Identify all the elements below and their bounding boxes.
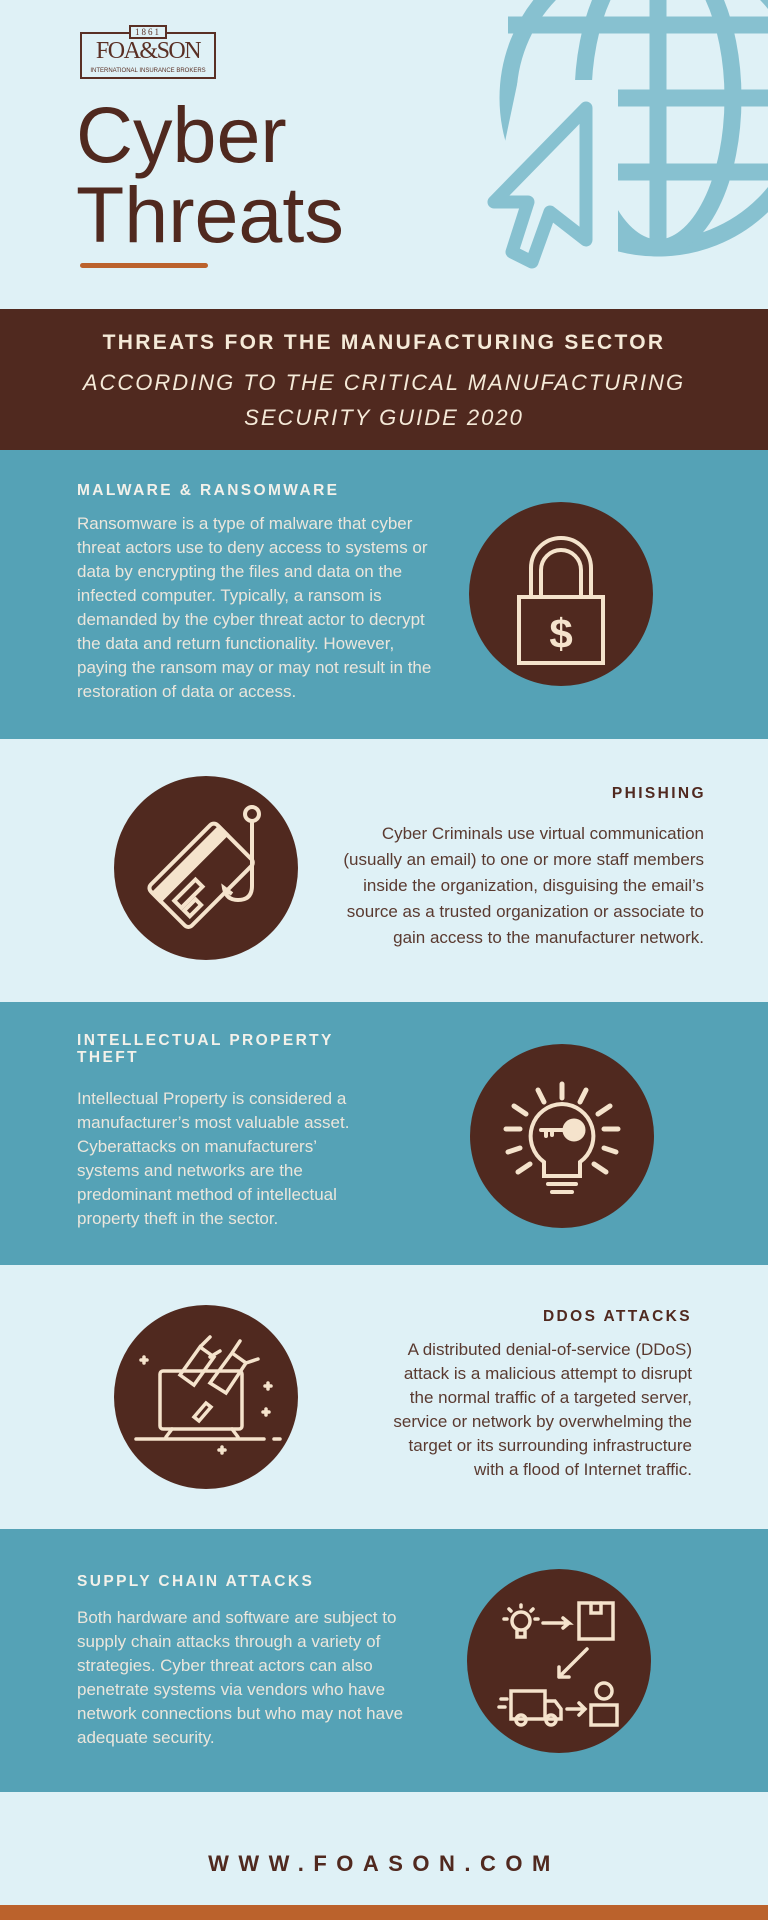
panel: IP theft: property theft in the sector. [77,1209,278,1228]
panel: malware: infected computer. Typically, a ransom is [77,586,382,605]
logo [80,25,216,79]
footer url: WWW.FOASON.COM [208,1851,560,1876]
panel: malware: threat actors use to deny access to systems or [77,538,428,557]
panel: phishing: PHISHING [612,785,706,802]
banner: ACCORDING TO THE CRITICAL MANUFACTURING [83,370,685,395]
panel: IP theft: Cyberattacks on manufacturers’ [77,1137,317,1156]
panel: IP theft: THEFT [77,1049,139,1066]
banner [0,309,768,450]
panel: malware: demanded by the cyber threat actor to decrypt [77,610,425,629]
panel: malware: the data and return functionality. However, [77,634,394,653]
panel: malware: data by encrypting the files and data on the [77,562,402,581]
panel: malware: restoration of data or access. [77,682,296,701]
title: Cyber [76,90,287,179]
panel: malware: paying the ransom may or may not result in the [77,658,431,677]
panel: DDoS: service or network by overwhelming the [393,1412,692,1431]
panel: phishing: Cyber Criminals use virtual communication [382,824,704,843]
icon: padlock [469,502,653,686]
bottom orange bar [0,1905,768,1920]
title underline [80,263,208,268]
panel: DDoS [0,1265,768,1529]
panel: phishing: source as a trusted organization or associate to [347,902,704,921]
panel: supply chain: strategies. Cyber threat actors can also [77,1656,373,1675]
banner: THREATS FOR THE MANUFACTURING SECTOR [103,331,665,354]
panel: IP theft [0,1002,768,1265]
panel: IP theft: manufacturer’s most valuable asset. [77,1113,349,1132]
panel: supply chain: network connections but who may not have [77,1704,403,1723]
panel: malware [0,450,768,739]
icon: laptop with missiles [114,1305,298,1489]
panel: malware: Ransomware is a type of malware that cyber [77,514,412,533]
icon: globe with cursor [488,0,768,268]
panel: DDoS: A distributed denial-of-service (DDoS) [408,1340,692,1359]
header section [0,0,768,309]
panel: phishing: inside the organization, disguising the email’s [363,876,704,895]
panel: DDoS: with a flood of Internet traffic. [474,1460,692,1479]
panel: IP theft: INTELLECTUAL PROPERTY [77,1032,334,1049]
panel: IP theft: predominant method of intellectual [77,1185,337,1204]
panel: supply chain: penetrate systems via vendors who have [77,1680,385,1699]
title: Threats [76,170,344,259]
panel: DDoS: DDOS ATTACKS [543,1308,692,1325]
panel: DDoS: target or its surrounding infrastructure [409,1436,692,1455]
panel: supply chain: adequate security. [77,1728,215,1747]
icon: padlock: $ [549,610,573,657]
footer url [0,1792,768,1905]
logo: FOA&SON [96,38,200,64]
panel: supply chain: SUPPLY CHAIN ATTACKS [77,1573,314,1590]
panel: phishing: (usually an email) to one or more staff members [343,850,704,869]
panel: malware: MALWARE & RANSOMWARE [77,482,339,499]
logo: INTERNATIONAL INSURANCE BROKERS [90,68,206,74]
panel: phishing [0,739,768,1002]
panel: supply chain: supply chain attacks through a variety of [77,1632,380,1651]
panel: supply chain [0,1529,768,1792]
icon: supply chain flow [467,1569,651,1753]
logo: 1861 [135,27,161,37]
panel: IP theft: systems and networks are the [77,1161,303,1180]
panel: supply chain: Both hardware and software are subject to [77,1608,396,1627]
panel: DDoS: the normal traffic of a targeted server, [410,1388,692,1407]
panel: IP theft: Intellectual Property is considered a [77,1089,346,1108]
icon: card on hook [114,776,298,960]
banner: SECURITY GUIDE 2020 [244,405,524,430]
panel: phishing: gain access to the manufacturer network. [393,928,704,947]
panel: DDoS: attack is a malicious attempt to disrupt [404,1364,692,1383]
title [76,90,344,259]
icon: lightbulb key [470,1044,654,1228]
